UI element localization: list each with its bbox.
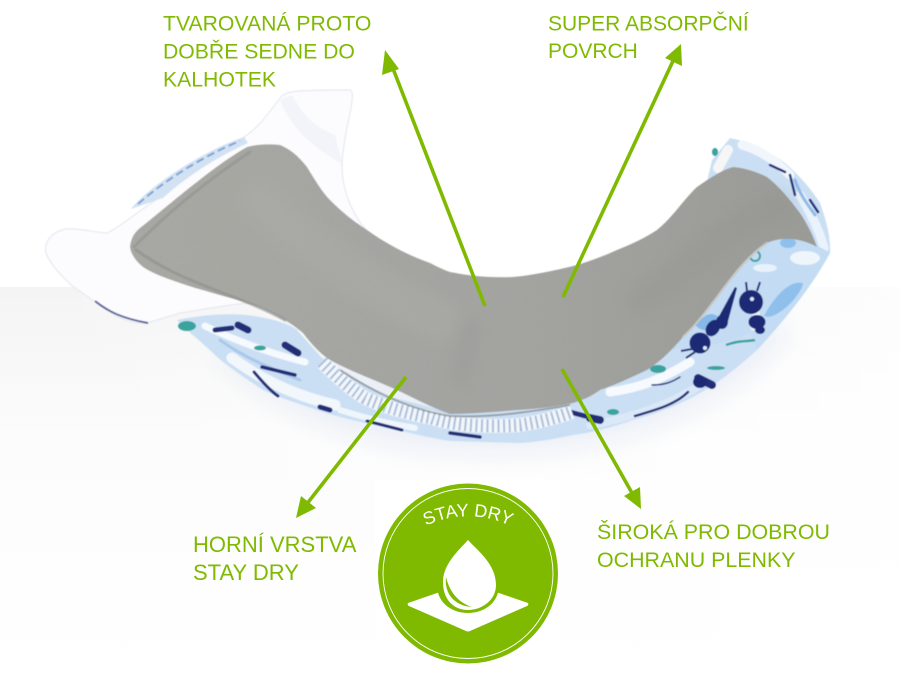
lower tab navy edge	[95, 301, 148, 323]
text: tvarovaná: KALHOTEK	[163, 68, 276, 92]
icon: mat	[408, 592, 528, 632]
floor shadow	[210, 320, 790, 454]
text: tvarovaná: DOBŘE SEDNE DO	[163, 38, 355, 64]
fabric fold highlights	[205, 145, 824, 428]
gathered elastic	[322, 362, 572, 426]
pad shading	[134, 152, 780, 380]
arrow: široká	[562, 369, 641, 509]
badge: stay dry	[378, 484, 558, 664]
upper tab shading	[280, 95, 343, 165]
icon: water drop	[437, 537, 499, 613]
grey stay-dry pad	[130, 144, 817, 414]
text: horní vrstva: STAY DRY	[193, 560, 299, 585]
text: široká: ŠIROKÁ PRO DOBROU	[597, 520, 830, 544]
text: super absorpční: SUPER ABSORPČNÍ	[548, 12, 749, 36]
pad edge shadow on elastic	[340, 370, 570, 416]
background floor	[0, 287, 900, 675]
arrow: super absorpční	[563, 44, 682, 297]
right flap	[663, 235, 830, 350]
arrow: horní vrstva	[296, 377, 406, 518]
navy and teal print	[215, 165, 818, 437]
back strip, left	[131, 137, 248, 209]
flap print: wings, leaves, ants	[681, 238, 820, 388]
photo: cloth diaper	[46, 90, 830, 454]
badge title: STAY DRY	[424, 504, 514, 524]
white liner with tabs	[46, 90, 368, 330]
text: široká: OCHRANU PLENKY	[597, 548, 796, 572]
blue outer fabric, front	[177, 138, 830, 443]
text: horní vrstva: HORNÍ VRSTVA	[193, 532, 356, 557]
arrow: tvarovaná	[382, 50, 485, 306]
text: super absorpční: POVRCH	[548, 40, 638, 63]
text: tvarovaná: TVAROVANÁ PROTO	[163, 12, 371, 36]
